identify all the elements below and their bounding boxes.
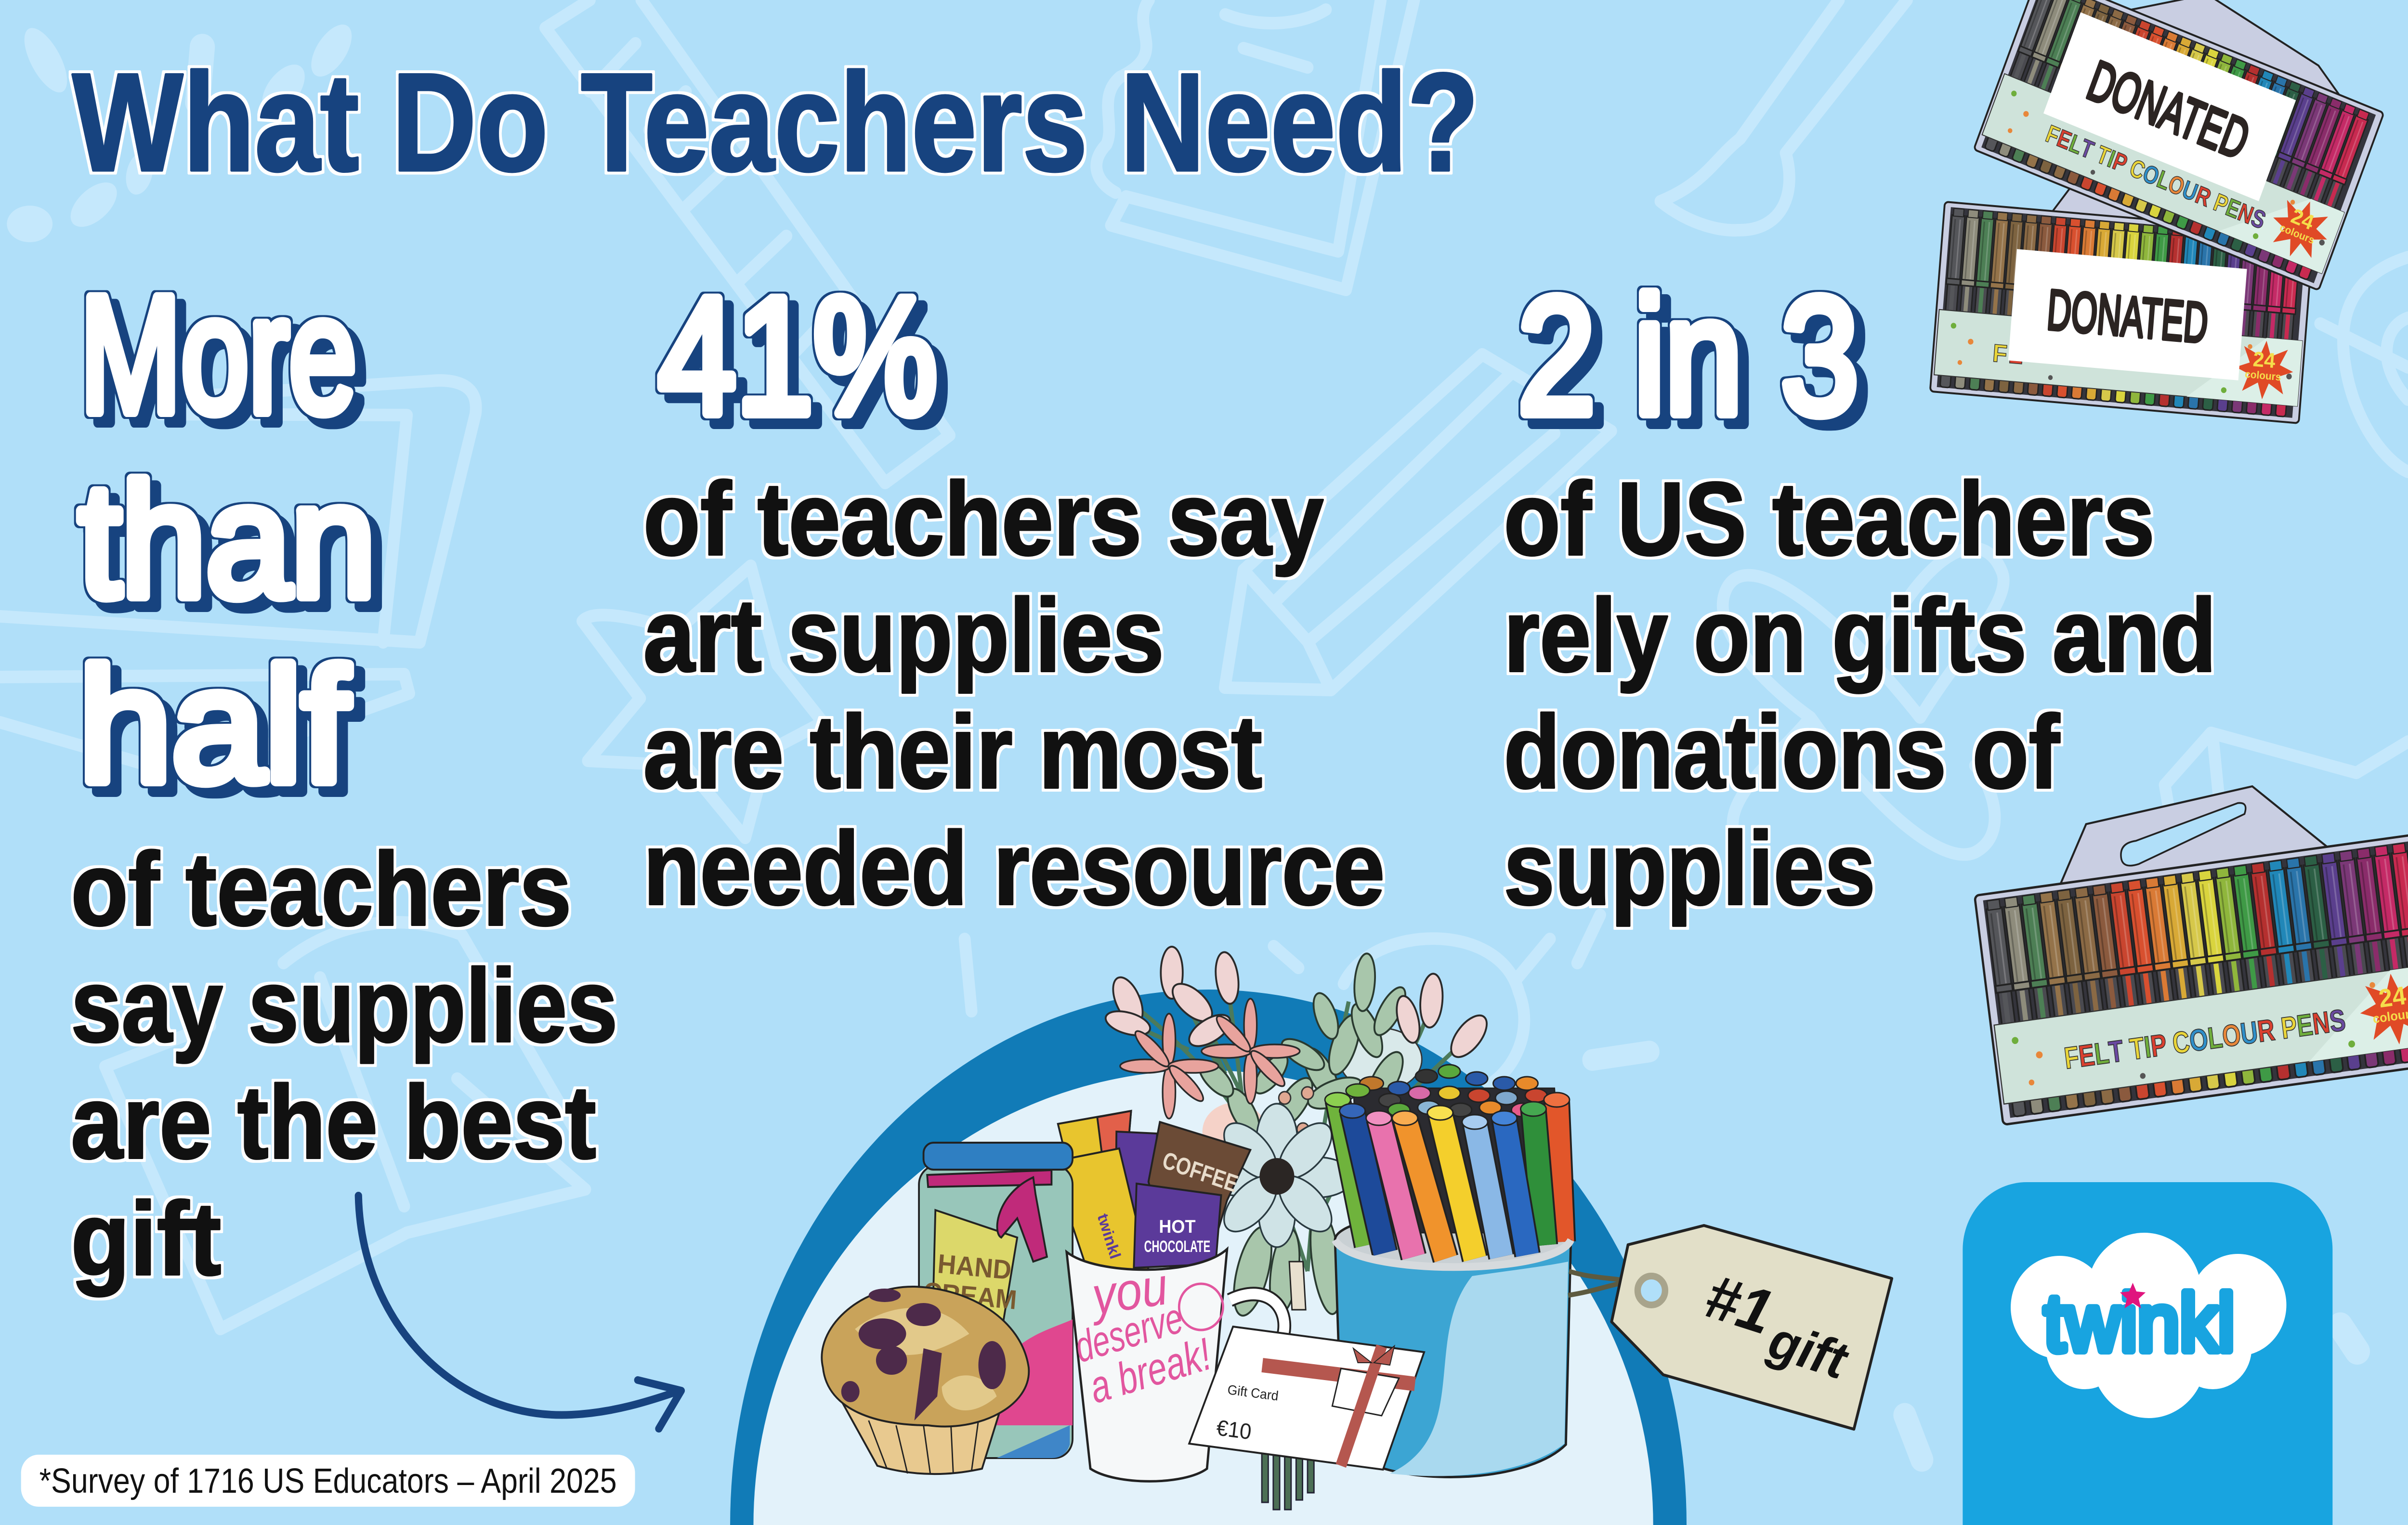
- illustration: snack sachets and bars: twinkl: [1094, 1212, 1124, 1261]
- illustration: donated pen pack, upper of stack: FELT TIP COLOUR PENS: [2042, 119, 2269, 235]
- illustration: snack sachets and bars: COFFEE: [1159, 1147, 1241, 1198]
- mug message: [1070, 1256, 1223, 1413]
- headline: 2 in 3: 2 in 3: [1518, 263, 1858, 449]
- illustration: donated pen pack, upper of stack: 24: [2288, 204, 2317, 235]
- illustration: donated pen pack, lower of stack: 24: [2252, 347, 2277, 373]
- illustration: you deserve a break mug: [1067, 1249, 1284, 1481]
- leaves: [1193, 952, 1412, 1320]
- statistic column: more than half: [71, 262, 618, 1297]
- body text: of teachers say supplies are the best gift: are the best: [71, 1064, 596, 1180]
- pens, front row: [1325, 1093, 1570, 1259]
- large pale flower: [1203, 1104, 1353, 1247]
- illustration: donated pen pack, upper of stack: colours: [2278, 222, 2316, 247]
- body text: of teachers say supplies are the best gift: say supplies: [71, 947, 618, 1064]
- footnote: survey source: *Survey of 1716 US Educators – April 2025: [39, 1461, 617, 1500]
- cloud: [2011, 1233, 2286, 1418]
- logo: twinkl panel: twinkl: [2044, 1277, 2235, 1368]
- headline: More than half: half: [79, 635, 349, 816]
- body text: art supplies: are their most: [643, 693, 1262, 810]
- illustration: bouquet of flowers: [1103, 947, 1493, 1510]
- body text: of teachers say supplies are the best gift: gift: [71, 1180, 221, 1297]
- body text: gifts and donations: of US teachers: [1504, 460, 2155, 577]
- illustration: snack sachets and bars: HOT: [1159, 1216, 1196, 1237]
- illustration: donated pen pack, lower of stack: L: [2008, 340, 2024, 369]
- illustration: jar with hand cream: CREAM: [922, 1277, 1018, 1315]
- illustration: jar with hand cream: HAND: [937, 1249, 1013, 1285]
- illustration: gift card: €10: [1215, 1415, 1253, 1445]
- body text: art supplies: needed resource: [643, 810, 1385, 926]
- mug message: a break!: [1084, 1328, 1216, 1413]
- tin: [1335, 1240, 1571, 1477]
- illustration: gift card: [1189, 1327, 1424, 1470]
- mug message: deserve: [1070, 1293, 1188, 1372]
- illustration: #1 gift tag: gift: [1762, 1310, 1855, 1391]
- title: What Do Teachers Need?: [72, 44, 1479, 200]
- body text: art supplies: of teachers say: [643, 460, 1323, 577]
- statistic column: 41%: [643, 263, 1385, 926]
- label: DONATED: DONATED: [2045, 278, 2211, 355]
- illustration: felt tip colour pens pack: [1966, 764, 2408, 1125]
- body text: gifts and donations: supplies: [1504, 810, 1875, 926]
- illustration: donated pen pack, lower of stack: colours: [2244, 368, 2281, 383]
- pens, back row: [1346, 1065, 1564, 1233]
- illustration: #1 gift tag: [1568, 1225, 1892, 1429]
- body text: gifts and donations: donations of: [1504, 693, 2060, 810]
- body text: gifts and donations: rely on gifts and: [1504, 577, 2216, 693]
- body text: of teachers say supplies are the best gift: of teachers: [71, 831, 572, 947]
- headline: 41%: 41%: [658, 263, 937, 449]
- label: DONATED: [2043, 13, 2296, 201]
- pink flowers: [1120, 999, 1300, 1119]
- headline: More than half: More: [80, 262, 356, 447]
- arrow pointing to gifts: [358, 1196, 681, 1429]
- illustration: donated pen pack, upper of stack: [1974, 0, 2399, 290]
- mug message: you: [1086, 1256, 1171, 1326]
- body text: of teachers say supplies are the best gift: [71, 831, 618, 1297]
- arch behind gifts: [730, 990, 1687, 1525]
- logo: twinkl panel: [1963, 1182, 2332, 1525]
- illustration: snack sachets and bars: [1051, 1111, 1250, 1270]
- label: DONATED: DONATED: [2080, 49, 2257, 171]
- illustration: snack sachets and bars: CHOCOLATE: [1144, 1238, 1210, 1256]
- label: DONATED: [2008, 249, 2247, 380]
- headline: More than half: than: [79, 450, 376, 631]
- illustration: blueberry muffin: [822, 1287, 1029, 1474]
- flower buds: [1103, 947, 1493, 1064]
- illustration: gift card: Gift Card: [1227, 1382, 1279, 1404]
- headline: More than half: [79, 262, 376, 816]
- body text: art supplies: art supplies: [643, 577, 1164, 693]
- illustration: pot of felt tip pens: [1325, 1065, 1571, 1477]
- illustration: #1 gift tag: #1: [1698, 1260, 1780, 1348]
- statistic column: 2 in 3: [1504, 263, 2216, 926]
- illustration: jar with hand cream: [919, 1143, 1073, 1458]
- body text: art supplies: [643, 460, 1385, 926]
- illustration: felt tip colour pens pack: 24: [2377, 981, 2408, 1014]
- footnote: survey source: [21, 1455, 635, 1507]
- illustration: donated pen pack, lower of stack: F: [1991, 339, 2008, 368]
- body text: gifts and donations: [1504, 460, 2216, 926]
- illustration: donated pen pack, lower of stack: [1930, 158, 2317, 423]
- illustration: felt tip colour pens pack: FELT TIP COLOUR PENS: [2062, 1003, 2347, 1076]
